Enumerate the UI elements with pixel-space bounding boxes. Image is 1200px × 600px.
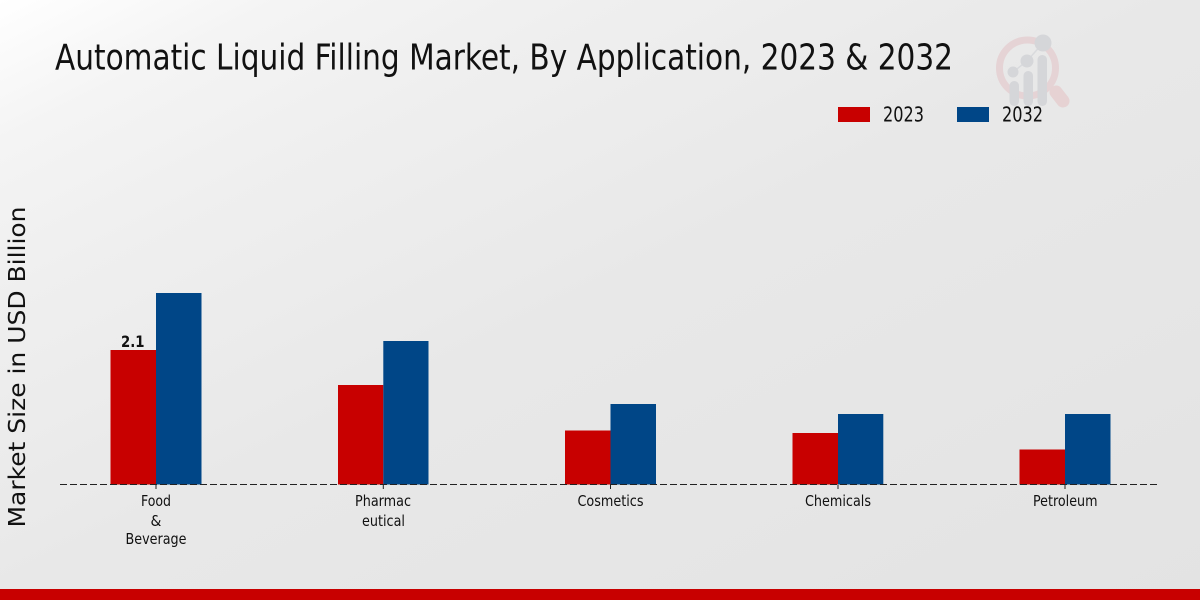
footer bar (0, 589, 1200, 600)
x axis labels (126, 492, 1098, 548)
group: Chemicals (792, 414, 883, 484)
label: ampersand: & (151, 512, 162, 530)
icon: watermark logo (1000, 34, 1063, 106)
bar chart (60, 293, 1160, 489)
group: Cosmetics (565, 404, 656, 484)
label: Petroleum: Petroleum (1033, 492, 1098, 510)
label: Chemicals: Chemicals (805, 492, 871, 510)
title: Automatic Liquid Filling Market, By Application, 2023 & 2032 (55, 38, 953, 78)
label: Food: Food (141, 492, 171, 510)
legend item: 2032: 2032 (1002, 102, 1043, 126)
label: Pharmac: Pharmac (355, 492, 411, 510)
baseline (60, 484, 1160, 486)
legend item: 2032 (957, 102, 1043, 126)
group: Food & Beverage (110, 293, 202, 484)
legend item: 2023 (838, 102, 924, 126)
group: Pharmaceutical (338, 341, 428, 484)
y axis label: Market Size in USD Billion (4, 206, 31, 528)
value label: 2.1 (121, 332, 144, 351)
legend (838, 102, 1043, 126)
label: Cosmetics: Cosmetics (578, 492, 644, 510)
legend item: 2023: 2023 (883, 102, 924, 126)
label: eutical: eutical (362, 512, 405, 530)
label: Beverage: Beverage (126, 530, 186, 548)
group: Petroleum (1020, 414, 1110, 484)
